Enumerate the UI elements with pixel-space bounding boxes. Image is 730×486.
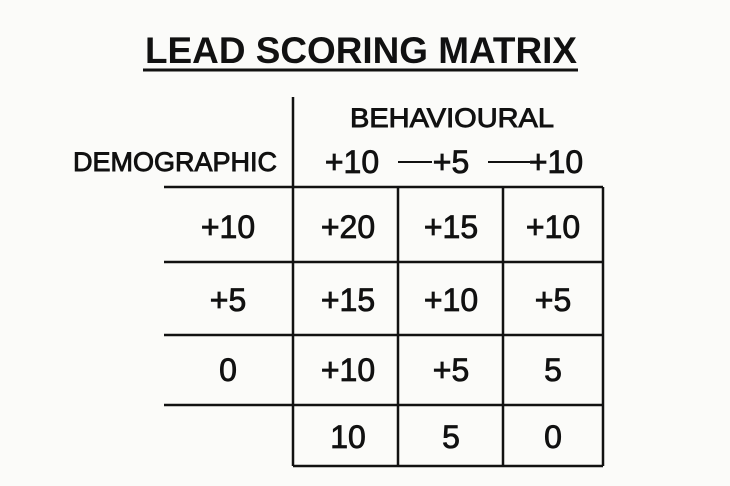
header: behavioural <box>325 103 583 180</box>
header: demographic: DEMOGRAPHIC <box>73 147 277 177</box>
matrix values: +10 <box>321 352 375 388</box>
matrix values: +5 <box>535 282 571 318</box>
matrix values: 5 <box>544 352 562 388</box>
matrix values: 10 <box>330 419 366 455</box>
row labels: 0 <box>219 352 237 388</box>
matrix values: +20 <box>321 209 375 245</box>
matrix values: +15 <box>424 209 478 245</box>
header: behavioural: +5 <box>433 144 469 180</box>
header: behavioural: +10 <box>325 144 379 180</box>
row labels: +10 <box>201 209 255 245</box>
matrix values: +5 <box>433 352 469 388</box>
header: behavioural: +10 <box>529 144 583 180</box>
row labels: +5 <box>210 282 246 318</box>
matrix values: +10 <box>526 209 580 245</box>
row labels <box>201 209 255 388</box>
matrix values: +15 <box>321 282 375 318</box>
header: behavioural: BEHAVIOURAL <box>350 103 554 133</box>
matrix values: +10 <box>424 282 478 318</box>
matrix values <box>321 209 580 455</box>
matrix values: 0 <box>544 419 562 455</box>
matrix values: 5 <box>442 419 460 455</box>
matrix grid <box>164 97 603 466</box>
title: LEAD SCORING MATRIX <box>145 30 577 71</box>
